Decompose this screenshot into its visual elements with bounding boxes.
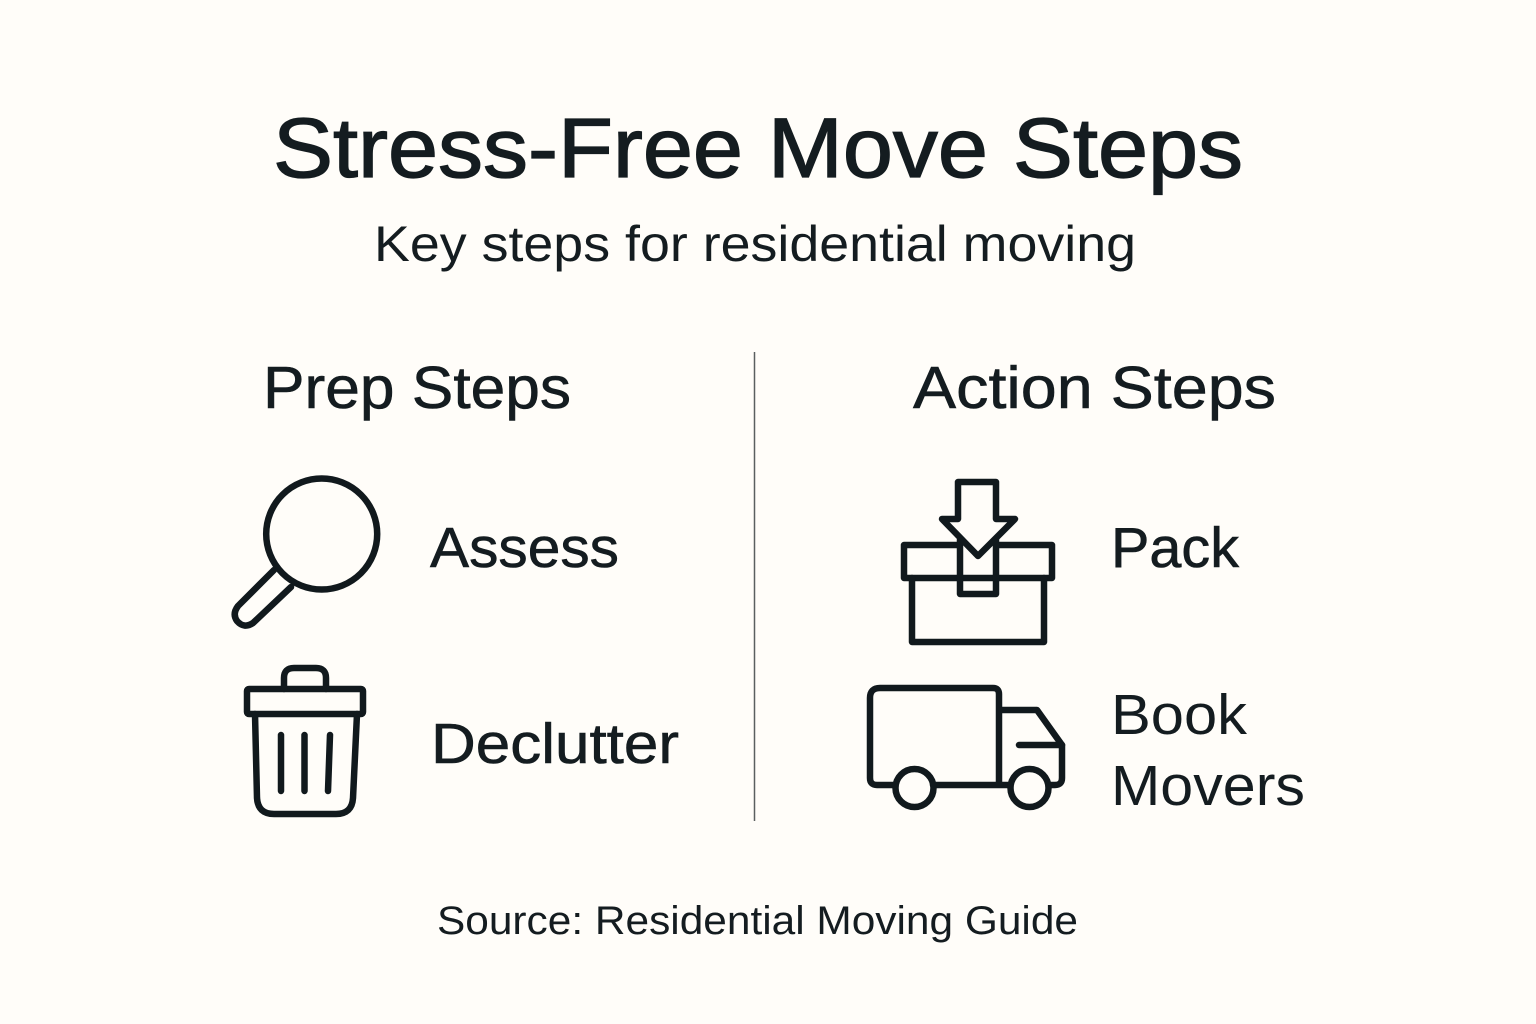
subtitle: Key steps for residential moving <box>374 216 1136 272</box>
title: Stress-Free Move Steps <box>273 101 1243 195</box>
icon: magnifying glass <box>235 478 377 626</box>
label: book movers: Movers <box>1111 754 1305 818</box>
heading: action steps: Action Steps <box>913 355 1276 421</box>
source note: Source: Residential Moving Guide <box>437 899 1078 943</box>
icon: box with arrow <box>904 482 1052 642</box>
icon: moving truck <box>870 688 1062 807</box>
panel: prep steps <box>235 355 679 814</box>
divider <box>754 352 756 821</box>
label: pack: Pack <box>1111 516 1239 580</box>
heading: prep steps: Prep Steps <box>263 355 571 421</box>
label: declutter: Declutter <box>431 712 679 776</box>
label: assess: Assess <box>430 516 619 580</box>
panel: action steps <box>870 355 1305 818</box>
label: book movers <box>1111 683 1305 818</box>
label: book movers: Book <box>1111 683 1248 747</box>
icon: trash can <box>247 668 363 814</box>
